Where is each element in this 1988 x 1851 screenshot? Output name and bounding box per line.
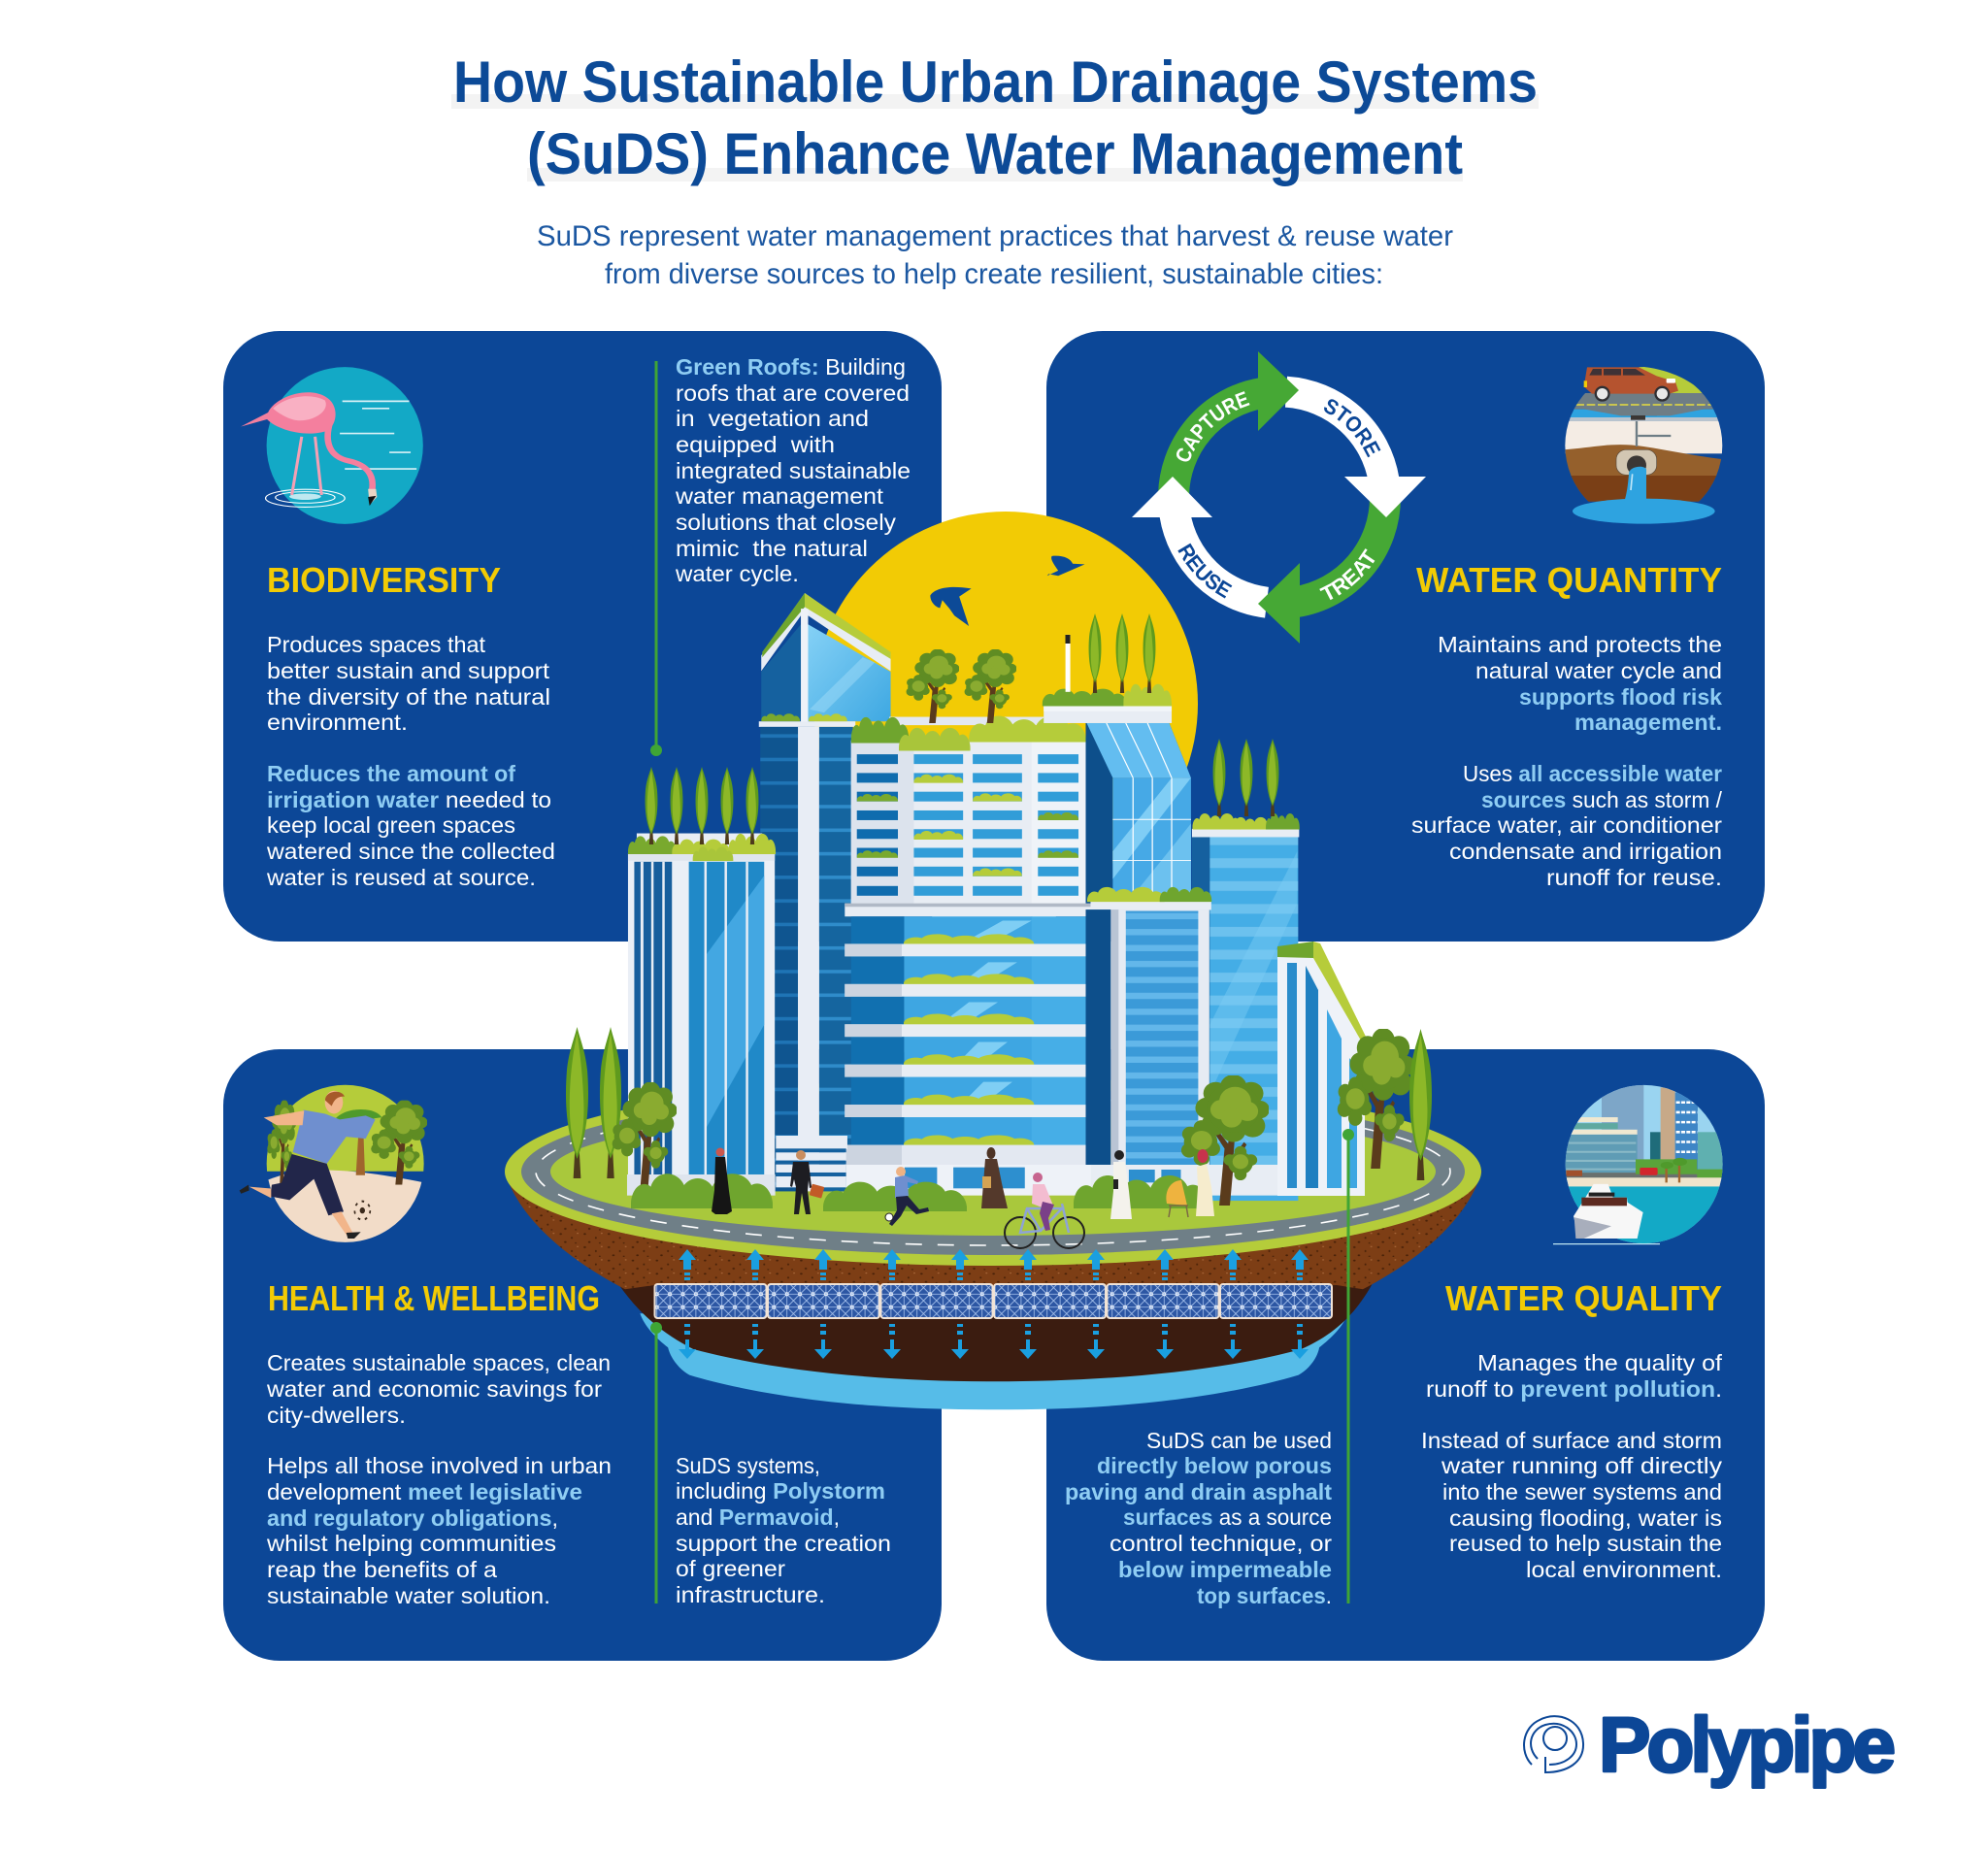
label: reuse: REUSE xyxy=(1177,544,1233,598)
text: biodiversity: water is reused at source. xyxy=(266,865,536,890)
text: health and wellbeing: and regulatory obligations, xyxy=(267,1505,558,1531)
logo mark xyxy=(1524,1716,1583,1772)
text: green roofs: integrated sustainable xyxy=(676,458,911,483)
text: biodiversity: irrigation water needed to xyxy=(267,787,551,812)
title: How Sustainable Urban Drainage Systems xyxy=(453,50,1538,115)
callout line: SuDS systems xyxy=(650,1322,662,1603)
buildings xyxy=(628,593,1300,1201)
text: SuDS systems xyxy=(676,1453,891,1607)
panel: water quantity xyxy=(1046,331,1765,942)
text: green roofs: roofs that are covered xyxy=(676,380,910,406)
text: water quantity xyxy=(1411,632,1723,890)
text: green roofs: Green Roofs: Building xyxy=(676,354,906,380)
text: water quantity: Uses all accessible water xyxy=(1463,761,1722,786)
text: green roofs: mimic the natural xyxy=(676,536,868,561)
text: water quantity: runoff for reuse. xyxy=(1546,865,1722,890)
birds xyxy=(930,556,1085,626)
person: man in white robe xyxy=(1110,1150,1132,1219)
person: woman in cream robe xyxy=(1196,1149,1214,1216)
text: green roofs xyxy=(675,354,911,586)
trees on roofs xyxy=(646,613,1278,844)
text: water quantity: surface water, air conditioner xyxy=(1411,812,1722,838)
icon: soccer player xyxy=(240,1083,428,1244)
panel: biodiversity xyxy=(223,331,942,942)
sun xyxy=(813,512,1198,896)
subtitle xyxy=(537,220,1453,290)
text: water quality: Instead of surface and storm xyxy=(1421,1428,1722,1453)
building: right tower xyxy=(1192,829,1299,1201)
text: SuDS paving xyxy=(1065,1428,1332,1608)
text: health and wellbeing xyxy=(266,1350,612,1608)
text: water quantity: natural water cycle and xyxy=(1475,658,1722,683)
text: health and wellbeing: reap the benefits of a xyxy=(267,1557,497,1582)
text: health and wellbeing: Creates sustainable spaces, clean xyxy=(267,1350,611,1375)
logo wordmark: Polypipe xyxy=(1599,1702,1896,1788)
text: SuDS paving: below impermeable xyxy=(1118,1557,1332,1582)
text: water quality: Manages the quality of xyxy=(1477,1350,1723,1375)
text: water quantity: Maintains and protects the xyxy=(1438,632,1722,657)
text: biodiversity: better sustain and support xyxy=(267,658,550,683)
text: SuDS systems: and Permavoid, xyxy=(676,1504,840,1530)
text: SuDS systems: including Polystorm xyxy=(676,1478,885,1504)
permeable paving modules xyxy=(654,1284,1332,1318)
text: biodiversity: environment. xyxy=(267,710,408,735)
text: green roofs: solutions that closely xyxy=(676,510,897,535)
text: water quality xyxy=(1421,1350,1723,1582)
text: biodiversity: the diversity of the natural xyxy=(267,684,550,710)
text: green roofs: equipped with xyxy=(676,432,835,457)
text: SuDS paving: SuDS can be used xyxy=(1146,1428,1332,1453)
text: green roofs: water management xyxy=(675,483,884,509)
icon: harbour and boat xyxy=(1553,1082,1725,1246)
text: SuDS systems: of greener xyxy=(676,1556,785,1581)
heading: water quantity: WATER QUANTITY xyxy=(1416,560,1722,600)
label: capture: CAPTURE xyxy=(1176,391,1250,462)
title xyxy=(451,50,1539,186)
logo: Polypipe xyxy=(1524,1702,1896,1788)
text: health and wellbeing: city-dwellers. xyxy=(267,1403,406,1428)
text: biodiversity xyxy=(266,632,555,890)
person: woman in brown robe xyxy=(981,1147,1008,1208)
person: man in black robe xyxy=(712,1147,732,1214)
person: boy playing football xyxy=(885,1167,929,1226)
water cycle diagram xyxy=(1132,351,1426,644)
text: water quality: causing flooding, water is xyxy=(1449,1505,1722,1531)
building: main block xyxy=(845,717,1091,1170)
text: SuDS systems: support the creation xyxy=(676,1531,891,1556)
heading: water quality: WATER QUALITY xyxy=(1445,1278,1722,1318)
text: health and wellbeing: Helps all those involved in urban xyxy=(267,1453,612,1478)
label: store: STORE xyxy=(1324,399,1380,458)
text: health and wellbeing: whilst helping communities xyxy=(266,1531,556,1556)
text: green roofs: in vegetation and xyxy=(676,406,869,431)
grass and road ring xyxy=(505,1077,1481,1266)
antenna xyxy=(1066,635,1071,692)
ring segments xyxy=(1174,392,1385,603)
text: biodiversity: Reduces the amount of xyxy=(267,761,515,786)
callout line: green roofs xyxy=(650,361,662,756)
text: water quantity: management. xyxy=(1574,710,1722,735)
text: SuDS paving: directly below porous xyxy=(1097,1453,1332,1478)
callout line: paving xyxy=(1342,1129,1354,1603)
text: health and wellbeing: sustainable water solution. xyxy=(267,1583,550,1608)
icon: car and drain pipe xyxy=(1563,366,1725,524)
text: water quality: local environment. xyxy=(1526,1557,1722,1582)
text: water quality: reused to help sustain the xyxy=(1449,1531,1722,1556)
text: biodiversity: watered since the collected xyxy=(266,839,555,864)
text: water quantity: condensate and irrigation xyxy=(1449,839,1722,864)
arrow heads xyxy=(1132,351,1426,644)
city illustration xyxy=(505,593,1481,1409)
text: SuDS systems: infrastructure. xyxy=(676,1582,825,1607)
ground shrubs xyxy=(631,1173,1208,1211)
label: treat: TREAT xyxy=(1319,548,1375,600)
building: tall tower with pitched roof xyxy=(759,593,891,1191)
text: water quality: water running off directly xyxy=(1441,1453,1723,1478)
downward water arrows xyxy=(679,1324,1309,1359)
text: green roofs: water cycle. xyxy=(675,561,799,586)
text: SuDS paving: top surfaces. xyxy=(1197,1583,1332,1608)
building: sloped-roof tower xyxy=(1277,942,1367,1196)
heading: health and wellbeing: HEALTH & WELLBEING xyxy=(268,1278,600,1318)
title: (SuDS) Enhance Water Management xyxy=(527,121,1463,186)
island base xyxy=(505,1172,1481,1409)
person: cyclist on bicycle xyxy=(1005,1173,1084,1248)
pram xyxy=(1166,1180,1188,1217)
text: water quantity: sources such as storm / xyxy=(1481,787,1723,812)
icon: flamingo xyxy=(241,367,423,524)
building lower stripes and podium xyxy=(627,1136,1283,1196)
subtitle: SuDS represent water management practices that harvest & reuse water xyxy=(537,220,1453,252)
upward water arrows xyxy=(679,1249,1309,1280)
heading: biodiversity: BIODIVERSITY xyxy=(267,560,501,600)
roof gardens: main block xyxy=(761,713,1086,751)
text: biodiversity: keep local green spaces xyxy=(267,812,515,838)
text: health and wellbeing: development meet legislative xyxy=(267,1479,582,1504)
building: left tower xyxy=(628,834,775,1189)
text: SuDS paving: control technique, or xyxy=(1110,1531,1332,1556)
ring path guides xyxy=(1188,401,1271,464)
panel: water quality xyxy=(1046,1049,1765,1661)
building: glass tower xyxy=(1044,706,1211,1201)
text: SuDS paving: paving and drain asphalt xyxy=(1065,1479,1332,1504)
roof gardens: glass and right towers xyxy=(628,684,1300,902)
subtitle: from diverse sources to help create resilient, sustainable cities: xyxy=(605,258,1383,290)
panel: health and wellbeing xyxy=(223,1049,942,1661)
text: biodiversity: Produces spaces that xyxy=(267,632,486,657)
text: SuDS paving: surfaces as a source xyxy=(1123,1504,1332,1530)
text: water quality: runoff to prevent pollution . xyxy=(1426,1376,1722,1402)
text: SuDS systems: SuDS systems, xyxy=(676,1453,820,1478)
person: man in suit xyxy=(790,1150,824,1214)
text: water quality: into the sewer systems and xyxy=(1442,1479,1722,1504)
text: water quantity: supports flood risk xyxy=(1519,684,1722,710)
ground trees xyxy=(566,1027,1432,1206)
text: health and wellbeing: water and economic savings for xyxy=(266,1376,602,1402)
